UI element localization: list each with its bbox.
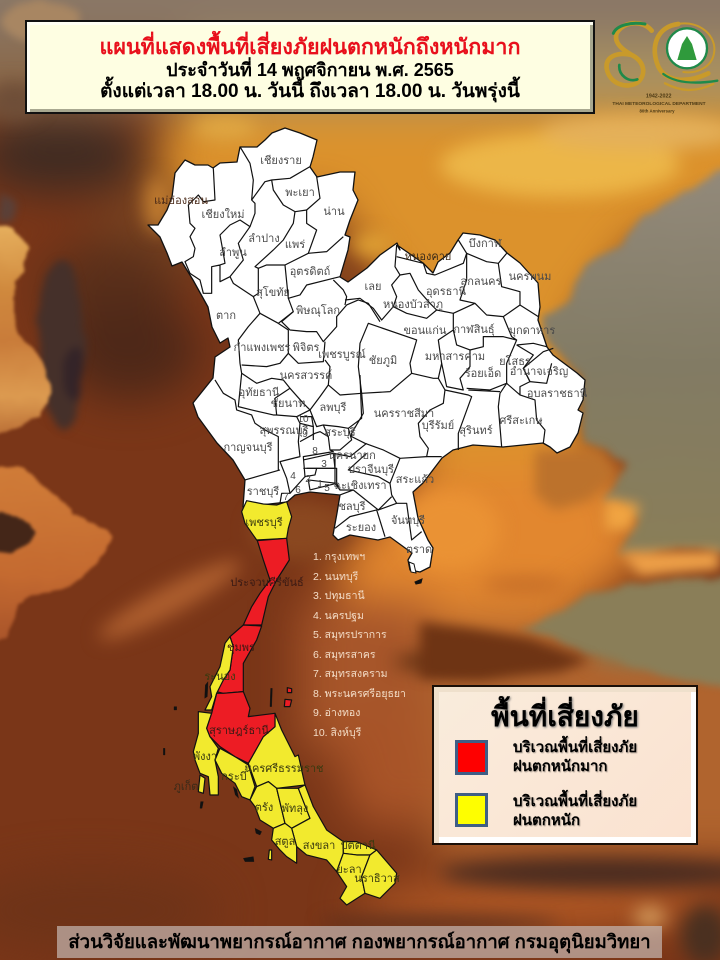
- province labels: ชัยนาท: [271, 398, 305, 410]
- province labels: มุกดาหาร: [509, 325, 555, 337]
- province labels: ตรัง: [255, 802, 273, 814]
- department seal: [667, 28, 707, 68]
- numbered list of central provinces: 3. ปทุมธานี: [313, 589, 365, 602]
- numbered list of central provinces: 6. สมุทรสาคร: [313, 649, 376, 661]
- numbered list of central provinces: 1. กรุงเทพฯ: [313, 551, 365, 563]
- province labels: กาฬสินธุ์: [453, 323, 495, 336]
- province labels: พิษณุโลก: [296, 303, 340, 317]
- province labels: แม่ฮ่องสอน: [154, 195, 208, 207]
- province labels: กระบี่: [221, 768, 247, 783]
- province labels: ฉะเชิงเทรา: [333, 480, 387, 492]
- province labels: 6: [295, 485, 301, 496]
- province labels: บุรีรัมย์: [422, 419, 454, 432]
- province labels: เชียงราย: [260, 154, 302, 167]
- province labels: ยโสธร: [499, 354, 531, 368]
- province labels: เลย: [365, 281, 381, 293]
- province labels: พังงา: [193, 751, 217, 763]
- province labels: ลพบุรี: [320, 401, 347, 414]
- province labels: ระนอง: [204, 671, 236, 683]
- province labels: 3: [321, 459, 327, 470]
- numeral 8: [607, 23, 652, 85]
- province labels: น่าน: [323, 206, 345, 218]
- province labels: อุตรดิตถ์: [290, 265, 330, 278]
- province labels: ลำพูน: [219, 247, 247, 259]
- numbered list of central provinces: 4. นครปฐม: [313, 610, 364, 622]
- province labels: 1: [317, 479, 323, 490]
- province labels: หนองบัวลำภู: [383, 299, 443, 311]
- label: heavy rain: [513, 790, 638, 829]
- province labels: นครพนม: [509, 271, 551, 283]
- province labels: อุดรธานี: [426, 285, 467, 298]
- province labels: แพร่: [285, 239, 305, 251]
- province labels: จันทบุรี: [391, 514, 425, 527]
- province labels: สุพรรณบุรี: [260, 424, 309, 437]
- swatch: very heavy rain: [455, 740, 488, 775]
- province labels: สุรินทร์: [459, 424, 493, 437]
- province labels: พิจิตร: [293, 342, 319, 354]
- province labels: ชุมพร: [227, 642, 255, 654]
- province labels: บึงกาฬ: [469, 238, 502, 250]
- numeral 0 ring and tail: [655, 23, 717, 90]
- label: heavy rain: ฝนตกหนัก: [513, 812, 580, 829]
- footer credit bar: ส่วนวิจัยและพัฒนาพยากรณ์อากาศ กองพยากรณ์อากาศ กรมอุตุนิยมวิทยา: [68, 931, 651, 952]
- numbered list of central provinces: 5. สมุทรปราการ: [313, 629, 387, 641]
- province labels: 9: [302, 429, 308, 440]
- numbered list of central provinces: 7. สมุทรสงคราม: [313, 668, 388, 680]
- label: very heavy rain: บริเวณพื้นที่เสี่ยงภัย: [513, 739, 637, 756]
- province labels: สกลนคร: [461, 276, 502, 288]
- province labels: 10: [297, 414, 309, 425]
- province labels: หนองคาย: [405, 251, 451, 263]
- province labels: ขอนแก่น: [404, 325, 447, 337]
- title line 1: แผนที่แสดงพื้นที่เสี่ยงภัยฝนตกหนักถึงหนักมาก: [100, 35, 520, 59]
- province labels: สุโขทัย: [256, 285, 290, 299]
- province labels: ศรีสะเกษ: [499, 414, 543, 427]
- logo captions: 80th Anniversary: [640, 109, 675, 114]
- province labels: 4: [290, 471, 296, 482]
- province labels: ราชบุรี: [247, 485, 279, 498]
- province labels: ลำปาง: [248, 233, 280, 245]
- province labels: 7: [283, 492, 289, 503]
- title line 3: time range: ตั้งแต่เวลา 18.00 น. วันนี้ ถึงเวลา 18.00 น. วันพรุ่งนี้: [100, 81, 520, 102]
- logo: 80th anniversary: [604, 20, 718, 114]
- province labels: สงขลา: [303, 840, 335, 852]
- province labels: นครนายก: [328, 450, 376, 462]
- province labels: กำแพงเพชร: [234, 342, 291, 354]
- province labels: นครศรีธรรมราช: [244, 762, 324, 775]
- province labels: สระแก้ว: [396, 474, 434, 486]
- label: very heavy rain: [513, 736, 638, 775]
- province labels: ชัยภูมิ: [369, 355, 397, 367]
- logo captions: 1942-2022: [646, 93, 671, 99]
- province labels: ปราจีนบุรี: [348, 463, 394, 476]
- numbered list of central provinces: 2. นนทบุรี: [313, 570, 359, 583]
- province labels: ระยอง: [346, 522, 376, 534]
- province labels: ชลบุรี: [338, 500, 366, 513]
- province labels: อำนาจเจริญ: [510, 366, 568, 378]
- province labels: ร้อยเอ็ด: [465, 366, 501, 380]
- province labels: ตราด: [406, 544, 432, 556]
- province labels: นครราชสีมา: [374, 407, 434, 420]
- province labels: พะเยา: [285, 187, 315, 199]
- grey sky and soft cloud masses: [0, 0, 720, 690]
- logo captions: [612, 93, 706, 114]
- province labels: สระบุรี: [324, 426, 356, 439]
- legend heading: พื้นที่เสี่ยงภัย: [491, 701, 639, 732]
- legend panel: [432, 685, 698, 845]
- clouds: [0, 222, 113, 643]
- province labels: กาญจนบุรี: [223, 441, 273, 454]
- province labels: 8: [312, 446, 318, 457]
- northern, central and north-eastern provinces (white): [148, 128, 585, 572]
- province labels: ยะลา: [336, 864, 362, 876]
- province labels: [154, 154, 588, 885]
- province labels: มหาสารคาม: [425, 351, 485, 363]
- swatch: heavy rain: [455, 793, 488, 827]
- logo captions: THAI METEOROLOGICAL DEPARTMENT: [612, 101, 706, 107]
- footer credit bar: [57, 926, 662, 958]
- province labels: อุบลราชธานี: [527, 387, 588, 400]
- label: very heavy rain: ฝนตกหนักมาก: [513, 758, 607, 775]
- title line 2: date: ประจำวันที่ 14 พฤศจิกายน พ.ศ. 2565: [166, 60, 454, 80]
- province labels: ตาก: [216, 310, 236, 322]
- province labels: 5: [324, 483, 330, 494]
- province labels: สตูล: [275, 836, 295, 848]
- province labels: ภูเก็ต: [174, 779, 198, 793]
- numbered list of central provinces: [313, 551, 406, 739]
- province labels: ประจวบคีรีขันธ์: [230, 576, 304, 589]
- numbered list of central provinces: 10. สิงห์บุรี: [313, 726, 362, 739]
- title panel: [25, 20, 595, 114]
- numbered list of central provinces: 8. พระนครศรีอยุธยา: [313, 687, 406, 700]
- province labels: อุทัยธานี: [239, 386, 280, 399]
- province labels: พัทลุง: [282, 803, 308, 815]
- province labels: เชียงใหม่: [202, 208, 244, 221]
- label: heavy rain: บริเวณพื้นที่เสี่ยงภัย: [513, 793, 637, 810]
- eastern islands: [409, 562, 422, 584]
- numbered list of central provinces: 9. อ่างทอง: [313, 707, 360, 719]
- province labels: ปัตตานี: [341, 839, 376, 852]
- province labels: เพชรบุรี: [245, 516, 283, 529]
- province labels: เพชรบูรณ์: [318, 348, 366, 361]
- province labels: สุราษฎร์ธานี: [209, 724, 269, 737]
- province labels: นราธิวาส: [354, 873, 400, 885]
- province labels: 2: [305, 474, 311, 485]
- province labels: นครสวรรค์: [280, 369, 332, 382]
- southern provinces (red and yellow): [163, 501, 397, 905]
